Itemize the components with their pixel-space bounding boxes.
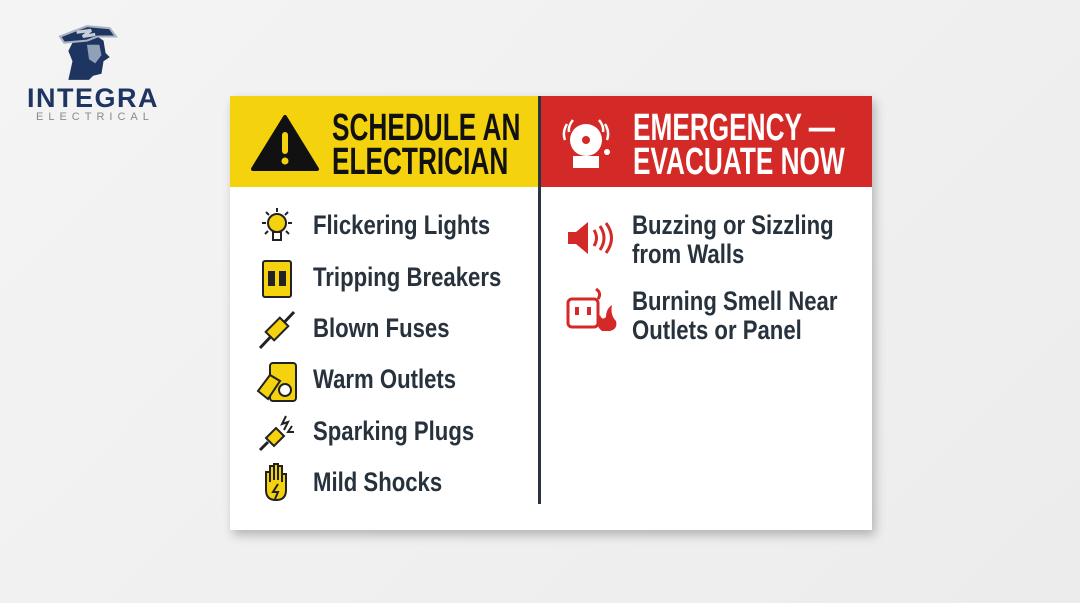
list: emergency items: Buzzing or Sizzling — [632, 210, 834, 240]
heading: schedule an electrician: ELECTRICIAN — [332, 141, 508, 183]
icon: bulb — [262, 208, 292, 241]
icon: hand shock — [265, 463, 287, 501]
logo — [27, 25, 159, 123]
list: schedule items: Flickering Lights — [313, 210, 490, 240]
list: schedule items: Tripping Breakers — [313, 262, 501, 292]
icon: warm outlet — [256, 362, 297, 402]
icon: warning — [251, 114, 320, 171]
icon: sparking plug — [259, 416, 294, 451]
list: emergency items: Burning Smell Near — [632, 286, 837, 316]
icon: speaker — [568, 222, 613, 254]
list: schedule items: Warm Outlets — [313, 364, 456, 394]
list: schedule items — [256, 208, 501, 501]
icon: fuse — [259, 311, 295, 349]
heading: schedule an electrician — [230, 96, 539, 187]
panel: card — [230, 96, 872, 530]
icon: breaker — [262, 260, 292, 298]
heading: emergency: EMERGENCY — — [633, 107, 835, 149]
heading: emergency — [541, 96, 872, 187]
list: emergency items: Outlets or Panel — [632, 315, 802, 345]
brand name: INTEGRA — [27, 83, 159, 113]
icon: burning outlet — [566, 288, 616, 331]
list: schedule items: Blown Fuses — [313, 313, 450, 343]
heading: schedule an electrician: SCHEDULE AN — [332, 107, 520, 149]
list: emergency items: from Walls — [632, 239, 744, 269]
divider — [538, 96, 541, 504]
icon: helmet head — [58, 25, 118, 80]
heading: emergency: EVACUATE NOW — [633, 141, 845, 183]
list: schedule items: Sparking Plugs — [313, 416, 474, 446]
logo: ELECTRICAL — [36, 111, 154, 123]
icon: alarm bell — [562, 119, 610, 168]
list: schedule items: Mild Shocks — [313, 467, 442, 497]
list: emergency items — [566, 210, 838, 345]
